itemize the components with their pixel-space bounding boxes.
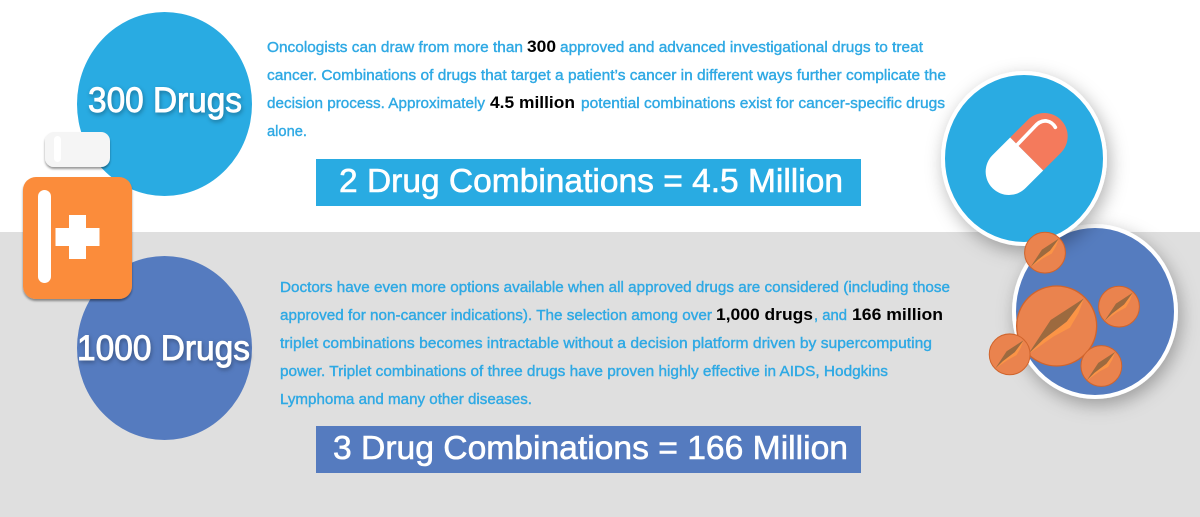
text block: 1000 drugs paragraph: power. Triplet combinations of three drugs have proven highly effective in AIDS, Hodgkins xyxy=(280,363,888,380)
circle: 300 drugs: 300 Drugs xyxy=(88,81,242,120)
text block: 1000 drugs paragraph: Doctors have even more options available when all approved drugs are considered (including those xyxy=(280,279,950,296)
icon: medicine bottle xyxy=(23,132,132,299)
cell: large xyxy=(1017,286,1097,366)
circle: 1000 drugs: 1000 Drugs xyxy=(77,329,250,368)
cell: top xyxy=(1025,232,1065,273)
cell: left xyxy=(989,334,1030,375)
text block: 300 drugs paragraph: cancer. Combinations of drugs that target a patient’s cancer in different ways further complicate the xyxy=(267,67,946,84)
text block: 300 drugs paragraph: 300 xyxy=(527,38,556,56)
text block: 300 drugs paragraph: alone. xyxy=(267,123,307,140)
text block: 1000 drugs paragraph xyxy=(280,279,950,408)
circle: 300 drugs xyxy=(77,12,252,196)
icon: cancer cells xyxy=(989,232,1139,386)
banner: 3 drug combinations: 3 Drug Combinations = 166 Million xyxy=(333,430,848,467)
text block: 1000 drugs paragraph: approved for non-cancer indications). The selection among over xyxy=(280,307,712,324)
panel: grey lower background xyxy=(0,232,1200,517)
circle: 1000 drugs xyxy=(77,256,252,440)
cell: bottom xyxy=(1081,346,1122,386)
text block: 300 drugs paragraph: potential combinations exist for cancer-specific drugs xyxy=(581,95,945,112)
text block: 1000 drugs paragraph: , and xyxy=(814,307,847,324)
text block: 1000 drugs paragraph: 166 million xyxy=(852,306,943,324)
text block: 1000 drugs paragraph: Lymphoma and many other diseases. xyxy=(280,391,532,408)
cell: right xyxy=(1099,286,1139,327)
text block: 300 drugs paragraph xyxy=(267,38,946,140)
text block: 300 drugs paragraph: approved and advanced investigational drugs to treat xyxy=(560,39,924,56)
banner: 2 drug combinations: 2 Drug Combinations = 4.5 Million xyxy=(339,163,843,200)
text block: 300 drugs paragraph: 4.5 million xyxy=(490,94,575,112)
icon: cancer cells circle xyxy=(1014,226,1176,397)
text block: 300 drugs paragraph: decision process. Approximately xyxy=(267,95,485,112)
text block: 1000 drugs paragraph: triplet combinations becomes intractable without a decision platform driven by supercomputing xyxy=(280,335,932,352)
text block: 1000 drugs paragraph: 1,000 drugs xyxy=(716,306,813,324)
icon: pill circle xyxy=(943,73,1105,244)
text block: 300 drugs paragraph: Oncologists can draw from more than xyxy=(267,39,523,56)
